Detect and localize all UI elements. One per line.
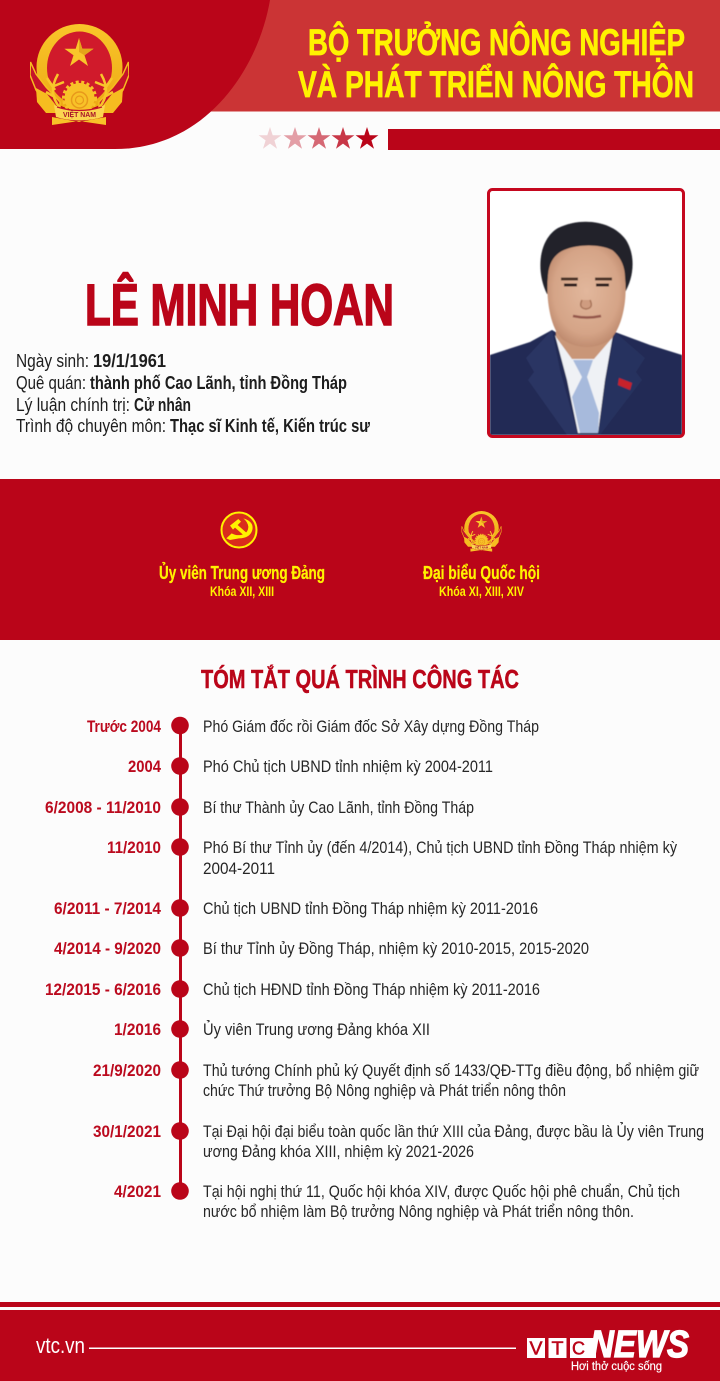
mouth xyxy=(573,316,601,318)
eyes xyxy=(564,284,609,286)
timeline entry 7: 12/2015 - 6/2016 xyxy=(45,980,161,999)
timeline entry 10 xyxy=(93,1122,704,1161)
role: party central committee: Khóa XII, XIII xyxy=(210,584,274,599)
brows xyxy=(561,278,612,280)
timeline entry 8: Ủy viên Trung ương Đảng khóa XII xyxy=(203,1020,430,1039)
career timeline xyxy=(45,717,704,1221)
footer xyxy=(0,1302,720,1381)
timeline entry 4: 11/2010 xyxy=(107,838,161,857)
timeline entry 11: nước bổ nhiệm làm Bộ trưởng Nông nghiệp và Phát triển nông thôn. xyxy=(203,1202,634,1221)
role: party central committee xyxy=(159,512,325,599)
timeline entry 11 xyxy=(114,1182,680,1221)
timeline entry 3: Bí thư Thành ủy Cao Lãnh, tỉnh Đồng Tháp xyxy=(203,798,474,817)
timeline entry 6: 4/2014 - 9/2020 xyxy=(54,939,161,958)
timeline entry 2: 2004 xyxy=(128,757,161,776)
timeline entry 3 xyxy=(45,798,474,817)
VTC News logo: Hơi thở cuộc sống xyxy=(571,1361,662,1373)
shirt xyxy=(555,335,613,433)
timeline entry 6 xyxy=(54,939,589,958)
timeline entry 5: 6/2011 - 7/2014 xyxy=(54,899,161,918)
VTC News logo: NEWS xyxy=(590,1324,689,1366)
timeline entry 5 xyxy=(54,899,538,918)
timeline entry 1 xyxy=(87,717,539,736)
role: party central committee: Ủy viên Trung ương Đảng xyxy=(159,562,325,583)
name heading: LÊ MINH HOAN xyxy=(85,273,394,338)
timeline entry 2: Phó Chủ tịch UBND tỉnh nhiệm kỳ 2004-2011 xyxy=(203,757,493,776)
timeline entry 4 xyxy=(107,838,677,878)
timeline entry 8: 1/2016 xyxy=(114,1020,161,1039)
icon: national emblem xyxy=(30,24,129,125)
section heading: career summary: TÓM TẮT QUÁ TRÌNH CÔNG TÁC xyxy=(201,664,519,694)
role: national assembly deputy: Đại biểu Quốc hội xyxy=(423,562,540,583)
timeline entry 9 xyxy=(93,1061,699,1100)
suit xyxy=(490,330,682,435)
header dark red curved shape xyxy=(0,0,270,149)
timeline entry 10: ương Đảng khóa XIII, nhiệm kỳ 2021-2026 xyxy=(203,1142,474,1161)
title xyxy=(298,21,694,105)
timeline entry 11: 4/2021 xyxy=(114,1182,161,1201)
timeline entry 10: 30/1/2021 xyxy=(93,1122,161,1141)
personal information block: Trình độ chuyên môn: xyxy=(16,416,166,436)
header panel xyxy=(0,0,720,149)
panel: party and assembly roles xyxy=(0,479,720,640)
personal information block: Ngày sinh: xyxy=(16,351,89,371)
timeline entry 7 xyxy=(45,980,540,999)
timeline entry 1: Trước 2004 xyxy=(87,717,161,736)
red bar beside stars xyxy=(388,129,720,150)
lapel pin xyxy=(618,378,632,390)
tie xyxy=(572,360,599,433)
personal information block: thành phố Cao Lãnh, tỉnh Đồng Tháp xyxy=(90,373,347,393)
personal information block xyxy=(16,351,371,436)
VTC News logo: T xyxy=(552,1338,564,1358)
personal information block: Quê quán: xyxy=(16,373,86,393)
timeline entry 1: Phó Giám đốc rồi Giám đốc Sở Xây dựng Đồng Tháp xyxy=(203,717,539,736)
neck xyxy=(556,322,614,359)
timeline dots xyxy=(171,717,189,1200)
nose xyxy=(581,300,591,309)
portrait photo xyxy=(488,190,684,436)
timeline entry 9: 21/9/2020 xyxy=(93,1061,161,1080)
personal information block: Lý luận chính trị: xyxy=(16,395,130,415)
timeline entry 2 xyxy=(128,757,493,776)
timeline entry 9: chức Thứ trưởng Bộ Nông nghiệp và Phát triển nông thôn xyxy=(203,1081,566,1100)
five stars rating strip xyxy=(259,127,378,149)
icon: national emblem small xyxy=(462,511,501,552)
timeline entry 3: 6/2008 - 11/2010 xyxy=(45,798,161,817)
VTC News logo: C xyxy=(572,1338,585,1358)
hair xyxy=(540,222,633,294)
photo frame xyxy=(488,190,684,436)
timeline axis xyxy=(179,726,182,1191)
role: national assembly deputy xyxy=(423,511,540,599)
footer site url: vtc.vn xyxy=(36,1333,85,1358)
VTC News logo: V xyxy=(530,1338,542,1358)
timeline entry 4: 2004-2011 xyxy=(203,859,275,878)
personal information block: 19/1/1961 xyxy=(93,351,166,371)
role: national assembly deputy: Khóa XI, XIII, XIV xyxy=(439,584,524,599)
timeline entry 7: Chủ tịch HĐND tỉnh Đồng Tháp nhiệm kỳ 2011-2016 xyxy=(203,980,540,999)
face xyxy=(547,246,626,347)
timeline entry 5: Chủ tịch UBND tỉnh Đồng Tháp nhiệm kỳ 2011-2016 xyxy=(203,899,538,918)
icon: hammer and sickle xyxy=(222,512,256,548)
timeline entry 8 xyxy=(114,1020,430,1039)
header light red band xyxy=(150,0,720,112)
timeline entry 6: Bí thư Tỉnh ủy Đồng Tháp, nhiệm kỳ 2010-2015, 2015-2020 xyxy=(203,939,589,958)
personal information block: Cử nhân xyxy=(134,395,191,415)
VTC News logo xyxy=(527,1324,689,1373)
personal information block: Thạc sĩ Kinh tế, Kiến trúc sư xyxy=(170,416,371,436)
